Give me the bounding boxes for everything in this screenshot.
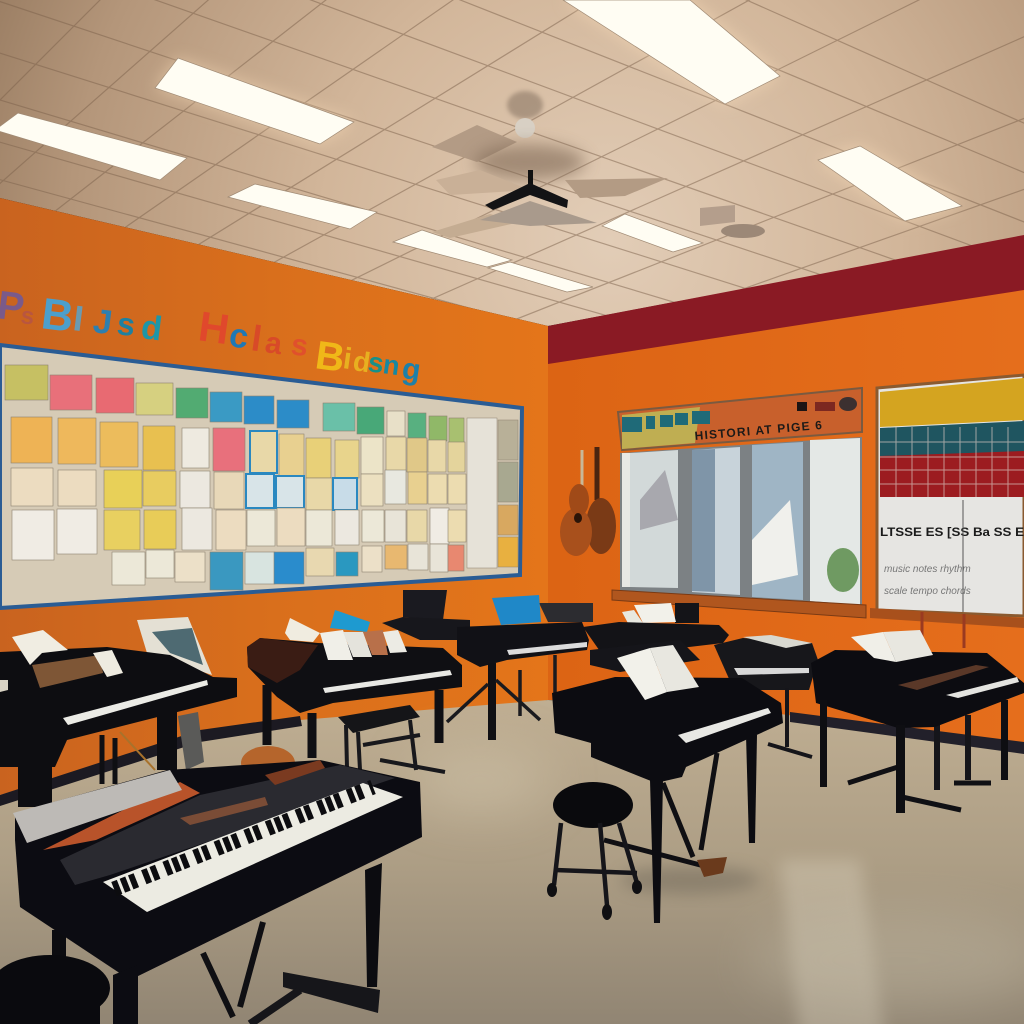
- wall title lettering: s: [115, 305, 137, 343]
- wall title lettering: J: [91, 302, 114, 342]
- right column of small notices: [467, 418, 518, 568]
- wall title lettering: l: [249, 317, 265, 359]
- background piano: back right: [583, 603, 818, 757]
- wall chart poster: [870, 375, 1024, 648]
- wall title lettering: s: [366, 346, 386, 379]
- grand piano: left: [0, 630, 237, 807]
- wall title lettering: a: [263, 326, 284, 361]
- wall title lettering: [0, 283, 423, 387]
- fourth row of notices: [12, 508, 466, 560]
- ceiling fan: [432, 91, 765, 238]
- wall chart poster: music notes rhythm: [884, 564, 971, 575]
- wall title lettering: B: [313, 333, 347, 381]
- second row of notices: [11, 417, 465, 478]
- wall title lettering: s: [19, 302, 36, 331]
- third row of notices: [11, 468, 466, 510]
- top row of notices: [5, 365, 464, 443]
- wall title lettering: g: [400, 352, 423, 387]
- electric keyboard: front left: [13, 760, 422, 1024]
- stool: centre: [547, 782, 642, 920]
- wall title lettering: H: [196, 302, 232, 353]
- floor: [0, 700, 1024, 1024]
- bulletin board: [0, 345, 522, 608]
- grand piano: centre right: [552, 645, 783, 923]
- bottom row of notices: [112, 544, 464, 590]
- stool: front left: [0, 955, 110, 1024]
- brown bag on floor: [241, 746, 295, 780]
- music poster above window: HISTORI AT PIGE 6: [694, 418, 824, 443]
- background piano: far centre: [330, 590, 593, 740]
- window: [612, 437, 866, 618]
- grand piano: centre left: [247, 618, 462, 758]
- wall title lettering: B: [39, 289, 76, 342]
- music poster above window: [618, 388, 862, 450]
- wall chart poster: scale tempo chords: [884, 586, 971, 597]
- wall title lettering: I: [71, 297, 86, 339]
- stool: centre left: [338, 705, 445, 772]
- ceiling: [0, 0, 1024, 326]
- grand piano: right: [811, 630, 1024, 813]
- wall title lettering: n: [381, 349, 402, 381]
- wall chart poster: LTSSE ES [SS Ba SS E: [880, 525, 1024, 539]
- wall title lettering: s: [289, 328, 310, 363]
- ceiling lights: [0, 0, 962, 292]
- wall title lettering: c: [227, 316, 251, 357]
- wall title lettering: d: [139, 308, 164, 348]
- right wall: [548, 288, 1024, 750]
- left wall: [0, 198, 548, 800]
- red soffit band: [548, 235, 1024, 364]
- wall title lettering: d: [351, 345, 372, 378]
- guitars on wall: [560, 447, 616, 556]
- framed tablet on piano: [137, 617, 212, 675]
- wall title lettering: i: [341, 342, 354, 376]
